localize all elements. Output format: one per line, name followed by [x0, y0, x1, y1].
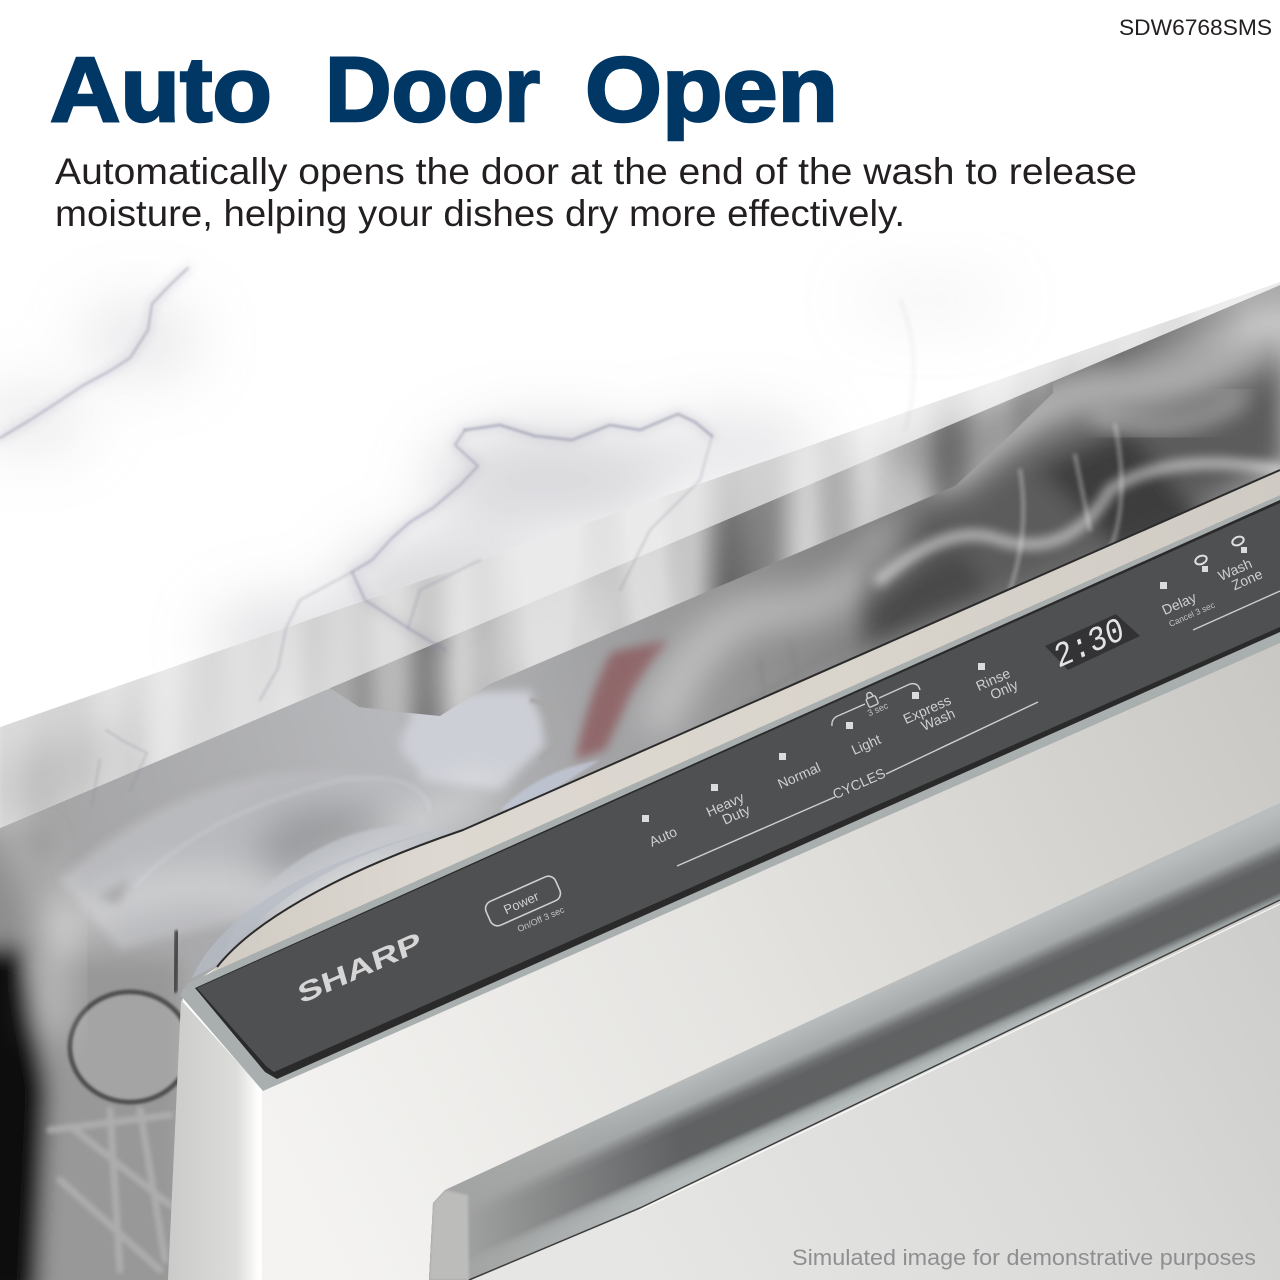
- title: Auto: [50, 39, 272, 141]
- cycle labels: Express: [901, 692, 953, 727]
- glass panel: [197, 503, 1280, 1072]
- cycle labels: Wash: [919, 705, 957, 734]
- subtitle: moisture, helping your dishes dry more effectively.: [55, 193, 905, 234]
- wash zone label: Wash: [1216, 555, 1254, 584]
- metal panel frame: [180, 495, 1280, 1091]
- title: Open: [585, 39, 838, 141]
- wash zone label: [1193, 555, 1280, 630]
- delay label: Cancel 3 sec: [1167, 599, 1217, 629]
- cycle labels: Light: [849, 731, 883, 758]
- power button: Power: [501, 888, 542, 917]
- cycle labels: Normal: [775, 759, 823, 792]
- delay label: [1159, 589, 1217, 629]
- title: Door: [325, 39, 540, 141]
- subtitle: Automatically opens the door at the end of the wash to release: [55, 151, 1137, 192]
- cycle labels: Heavy: [704, 789, 746, 820]
- cycle labels: Duty: [720, 801, 752, 828]
- recessed handle: [420, 803, 1280, 1280]
- time display: 2:30: [1051, 612, 1129, 679]
- dark interior zone: [860, 330, 1280, 650]
- marble countertop: [0, 297, 1188, 727]
- SHARP logo: SHARP: [294, 925, 425, 1010]
- cycle labels: [647, 665, 1020, 850]
- steam: [0, 330, 1280, 1020]
- model number: SDW6768SMS: [1119, 15, 1272, 40]
- door side face: [168, 1000, 263, 1280]
- lower door panel: [469, 905, 1280, 1280]
- cycle labels: Auto: [647, 823, 680, 850]
- cycles group label and rules: CYCLES: [830, 765, 888, 802]
- jug: [410, 690, 545, 790]
- title: [50, 39, 838, 141]
- delay label: Delay: [1159, 589, 1199, 618]
- lock icon and bracket: 3 sec: [866, 700, 890, 718]
- translucent plate rim over opening: [192, 826, 455, 978]
- dark shadow edge: [195, 500, 1280, 1079]
- marble veins: [0, 268, 914, 805]
- dishwasher interior with dishes and steam: [0, 280, 1280, 1280]
- cycle labels: Rinse: [973, 665, 1013, 694]
- red rack tine: [575, 640, 669, 760]
- rack and glass: [50, 425, 1121, 1270]
- door opening dark gasket line: [217, 470, 1280, 967]
- lock icon and bracket: [832, 684, 920, 726]
- cycle indicator LEDs: [642, 582, 1167, 822]
- countertop front edge: translucent veil: [0, 280, 1280, 830]
- cycle labels: Only: [988, 676, 1020, 703]
- stainless top strip of door: [195, 470, 1280, 985]
- cycles group label and rules: [677, 702, 1038, 866]
- tub wall at left: [0, 830, 180, 1280]
- subtitle: [55, 151, 1137, 234]
- wash zone icons: [1194, 535, 1247, 572]
- control panel: [180, 495, 1280, 1091]
- disclaimer: Simulated image for demonstrative purposes: [792, 1245, 1256, 1270]
- power button: [483, 874, 566, 934]
- band: gray steam veil: [320, 370, 1060, 720]
- wash zone label: Zone: [1229, 566, 1265, 593]
- power button: On/Off 3 sec: [516, 904, 566, 934]
- door front stainless panel: [262, 640, 1280, 1280]
- plates: [62, 714, 598, 957]
